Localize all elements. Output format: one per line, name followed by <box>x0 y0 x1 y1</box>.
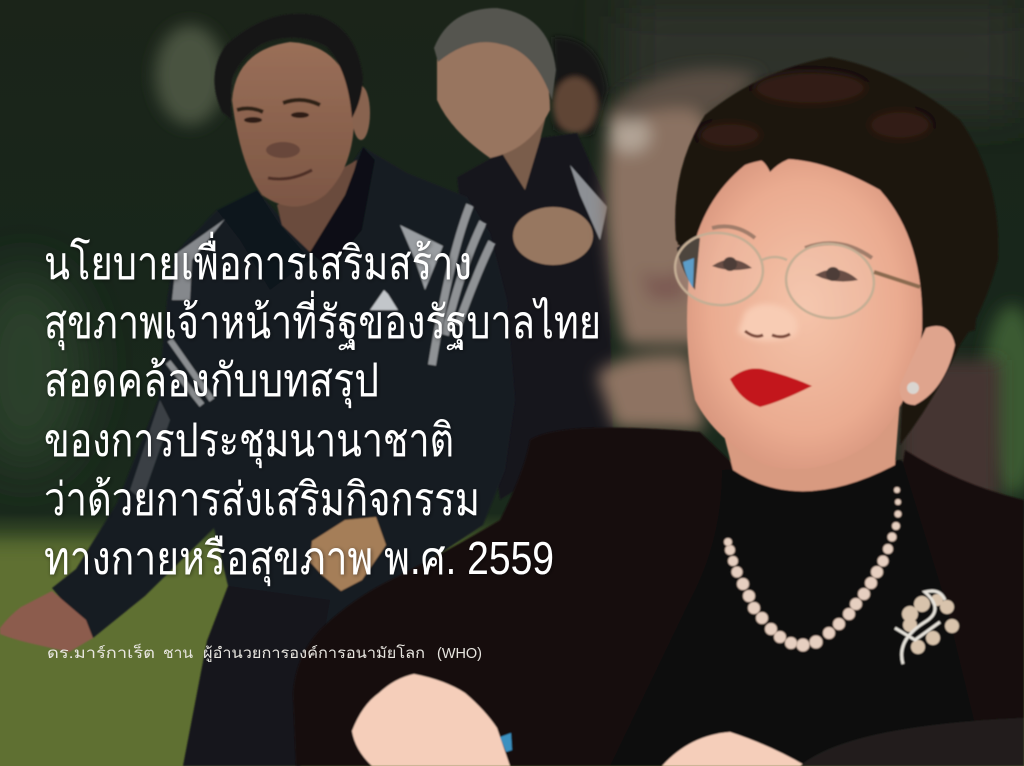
jacket stripes <box>432 205 492 365</box>
raised hands <box>352 674 510 766</box>
caption: ชาน <box>163 645 193 662</box>
woman in black <box>293 57 1024 766</box>
caption: ดร.มาร์กาเร็ต <box>47 643 155 662</box>
headline: นโยบายเพื่อการเสริมสร้าง <box>44 231 472 289</box>
lips <box>730 368 812 407</box>
eyebrows and eyes <box>712 226 872 282</box>
nose <box>738 304 798 341</box>
hair back <box>675 57 998 445</box>
caption: (WHO) <box>437 645 482 662</box>
headline: ทางกายหรือสุขภาพ พ.ศ. 2559 <box>44 532 554 587</box>
adidas logo <box>370 290 398 310</box>
pearl necklace <box>724 487 902 652</box>
blurred people in the background <box>434 8 760 500</box>
right fist <box>0 591 93 652</box>
hair fringe <box>677 74 951 275</box>
headline: สุขภาพเจ้าหน้าที่รัฐของรัฐบาลไทย <box>44 290 601 351</box>
jacket and trousers <box>52 147 515 766</box>
pearl brooch <box>895 591 959 664</box>
caption <box>47 643 482 662</box>
neck and collar <box>277 160 357 252</box>
rear man, dark hair <box>553 37 607 135</box>
headline: ของการประชุมนานาชาติ <box>44 414 454 469</box>
ear <box>352 86 370 140</box>
face <box>687 159 922 469</box>
headline: ว่าด้วยการส่งเสริมกิจกรรม <box>44 473 480 525</box>
man in tracksuit <box>0 14 515 766</box>
glasses <box>671 229 920 322</box>
blurred laughing person <box>597 69 760 430</box>
left fist <box>310 517 386 591</box>
jacket <box>293 428 1024 766</box>
person in dark jacket <box>434 8 613 500</box>
head <box>232 42 354 206</box>
headline <box>44 231 601 587</box>
ear with pearl earring <box>900 326 955 405</box>
face features <box>237 100 320 179</box>
headline: สอดคล้องกับบทสรุป <box>44 354 379 409</box>
turtleneck <box>610 460 985 766</box>
caption: ผู้อำนวยการองค์การอนามัยโลก <box>203 644 425 662</box>
hair <box>214 14 363 120</box>
sleeve <box>800 718 1024 766</box>
neck <box>720 400 900 491</box>
